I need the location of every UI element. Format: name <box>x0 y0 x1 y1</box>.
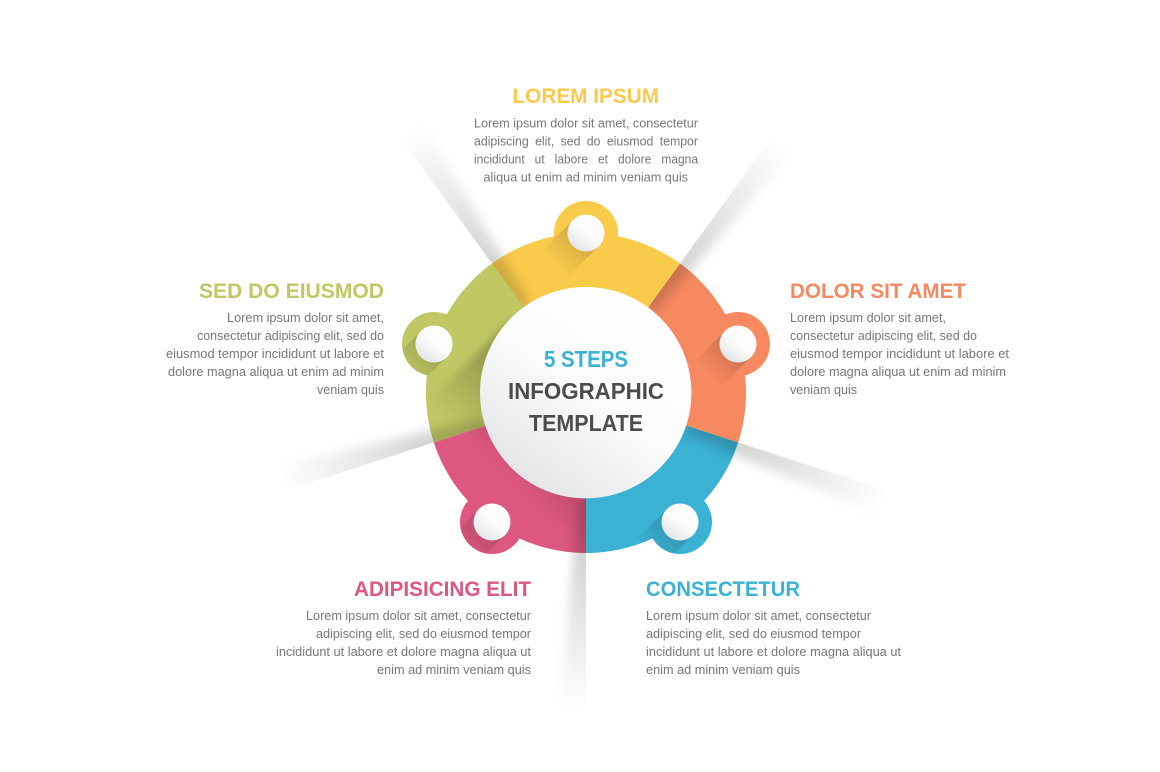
knob: green <box>402 326 452 376</box>
center title: 5 STEPS <box>544 346 628 372</box>
radial shadow: upper left <box>418 154 532 307</box>
step text: sed do eiusmod: SED DO EIUSMOD <box>199 280 384 303</box>
radial shadow: bottom <box>566 498 586 680</box>
center title: TEMPLATE <box>529 410 643 436</box>
step text: dolor sit amet <box>790 280 1009 397</box>
step text: sed do eiusmod: eiusmod tempor incididunt ut labore et <box>166 347 384 361</box>
step text: dolor sit amet: veniam quis <box>790 383 857 397</box>
ring segment: yellow <box>492 201 680 312</box>
step text: dolor sit amet: eiusmod tempor incididunt ut labore et <box>790 347 1009 361</box>
step text: consectetur: adipiscing elit, sed do eiusmod tempor <box>646 627 861 641</box>
step text: lorem ipsum: Lorem ipsum dolor sit amet, consectetur <box>474 116 698 130</box>
knob: yellow <box>548 214 604 272</box>
knob: orange <box>700 326 756 382</box>
radial shadow: left <box>310 416 485 481</box>
step text: lorem ipsum: adipiscing elit, sed do eiusmod tempor <box>474 134 698 148</box>
center circle shadow on ring <box>443 318 586 535</box>
step text: sed do eiusmod <box>166 280 384 397</box>
step text: sed do eiusmod: veniam quis <box>317 383 384 397</box>
step text: adipisicing elit: incididunt ut labore et dolore magna aliqua ut <box>276 645 531 659</box>
step text: sed do eiusmod: dolore magna aliqua ut enim ad minim <box>168 365 384 379</box>
step text: adipisicing elit: enim ad minim veniam quis <box>377 663 531 677</box>
ring segment: blue <box>586 424 738 554</box>
step text: consectetur: CONSECTETUR <box>646 578 800 601</box>
step text: dolor sit amet: DOLOR SIT AMET <box>790 280 966 303</box>
step text: lorem ipsum: aliqua ut enim ad minim veniam quis <box>484 170 688 184</box>
step text: lorem ipsum: LOREM IPSUM <box>512 85 659 108</box>
step text: dolor sit amet: consectetur adipiscing elit, sed do <box>790 329 977 343</box>
step text: consectetur <box>646 578 901 677</box>
step text: adipisicing elit: ADIPISICING ELIT <box>354 578 531 601</box>
step text: dolor sit amet: dolore magna aliqua ut enim ad minim <box>790 365 1006 379</box>
center title: INFOGRAPHIC <box>508 378 664 404</box>
step text: adipisicing elit <box>276 578 531 677</box>
knob: pink <box>460 504 510 554</box>
ring segment: green <box>402 264 527 442</box>
radial shadow: upper right <box>648 162 766 314</box>
center circle <box>480 287 691 498</box>
step text: lorem ipsum <box>474 85 698 184</box>
step text: consectetur: enim ad minim veniam quis <box>646 663 800 677</box>
knob: blue <box>642 504 698 554</box>
step text: lorem ipsum: incididunt ut labore et dolore magna <box>474 152 698 166</box>
step text: sed do eiusmod: Lorem ipsum dolor sit amet, <box>227 311 384 325</box>
center title <box>508 346 664 436</box>
ring segment: pink <box>434 424 586 554</box>
step text: consectetur: Lorem ipsum dolor sit amet, consectetur <box>646 609 871 623</box>
step text: adipisicing elit: Lorem ipsum dolor sit amet, consectetur <box>306 609 531 623</box>
step text: consectetur: incididunt ut labore et dolore magna aliqua ut <box>646 645 901 659</box>
radial shadow: right <box>684 426 858 496</box>
ring segment: orange <box>645 264 770 442</box>
step text: adipisicing elit: adipiscing elit, sed do eiusmod tempor <box>316 627 531 641</box>
step text: dolor sit amet: Lorem ipsum dolor sit amet, <box>790 311 946 325</box>
step text: sed do eiusmod: consectetur adipiscing elit, sed do <box>197 329 384 343</box>
